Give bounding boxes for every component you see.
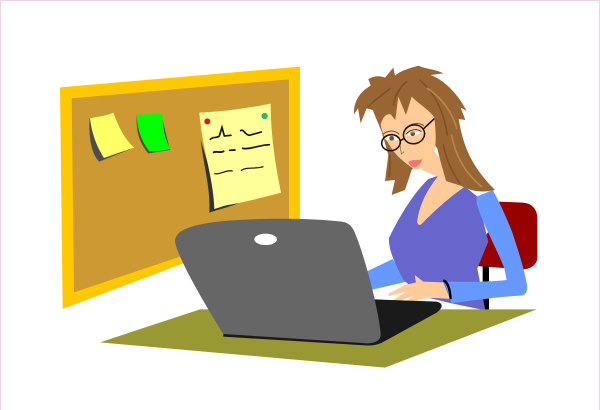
hair shading streaks	[368, 80, 482, 187]
purple top	[389, 176, 488, 310]
laptop logo	[254, 234, 277, 245]
chair and woman	[354, 66, 537, 310]
lips	[408, 159, 422, 167]
laptop lid	[175, 219, 381, 343]
eye: left	[383, 131, 399, 141]
face	[381, 97, 436, 169]
right arm sleeve	[444, 190, 527, 303]
hand and fingers	[388, 275, 450, 306]
neck and chest	[417, 152, 464, 225]
green pin	[261, 113, 268, 119]
pinned paper note	[199, 104, 281, 213]
handwriting scribbles	[210, 127, 269, 174]
eye: right	[405, 123, 424, 136]
corkboard	[60, 67, 300, 309]
chair	[476, 202, 537, 310]
left arm sleeve	[368, 259, 407, 290]
glasses	[380, 119, 434, 152]
red pin	[204, 118, 210, 124]
sticky note: yellow	[89, 113, 134, 162]
sticky note: green	[137, 114, 171, 153]
cuff	[443, 280, 451, 299]
hair back	[354, 66, 495, 195]
nose	[400, 144, 404, 154]
desk and laptop	[100, 219, 537, 368]
laptop keyboard base	[223, 299, 442, 346]
desk	[100, 309, 537, 368]
